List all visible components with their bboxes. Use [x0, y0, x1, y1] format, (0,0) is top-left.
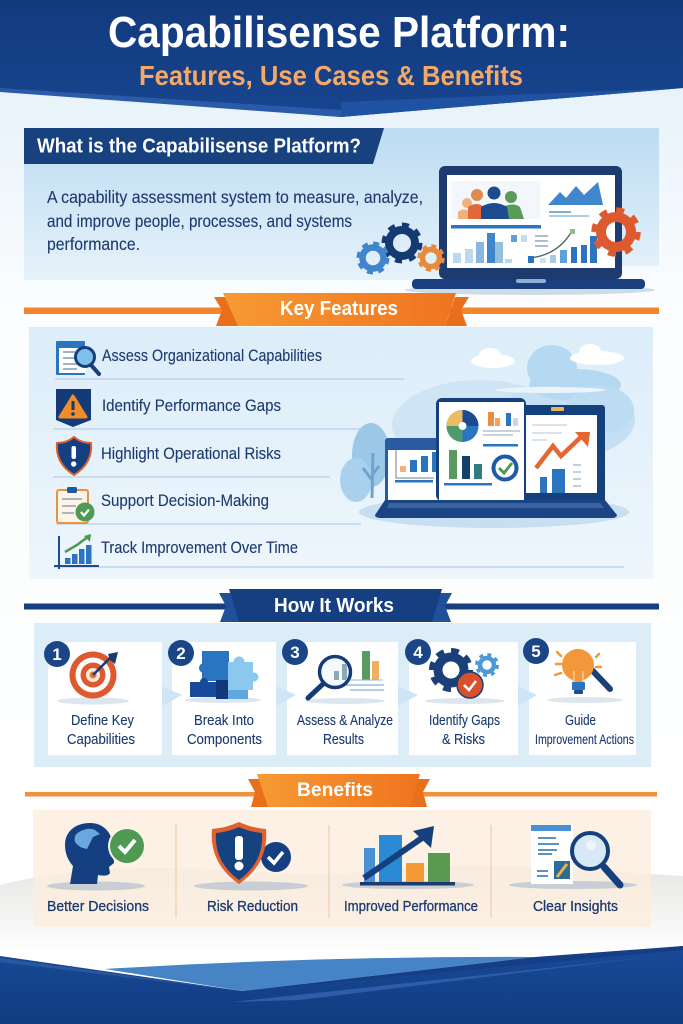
- icon: blue gear: [358, 244, 388, 272]
- icon: dark gear: [384, 225, 420, 261]
- feature 1 label: Assess Organizational Capabilities: [102, 346, 322, 365]
- icon: red gear: [594, 210, 638, 254]
- icon: light bulb and magnifier: [555, 649, 610, 694]
- step label: Break Into: [194, 713, 254, 729]
- step 1: [44, 641, 162, 755]
- step label: Results: [323, 732, 364, 748]
- feature 2 label: Identify Performance Gaps: [102, 396, 281, 415]
- feature 4 icon: clipboard with check: [57, 487, 94, 523]
- title: Capabilisense Platform:: [108, 8, 570, 57]
- benefit label: Better Decisions: [47, 898, 149, 915]
- step label: & Risks: [442, 732, 485, 748]
- step label: [67, 713, 135, 748]
- feature 1 icon: document with magnifier: [56, 341, 99, 375]
- icon: magnifier with bars: [308, 651, 384, 698]
- step 3: [282, 639, 398, 755]
- tree: [340, 423, 390, 502]
- icon: bar chart with arrow: [360, 826, 455, 886]
- description line 2: and improve people, processes, and systems: [47, 211, 352, 231]
- section divider: key features: [24, 293, 659, 326]
- feature 3 icon: risk shield: [57, 437, 91, 475]
- icon: report with magnifier: [531, 825, 620, 885]
- benefit: clear insights: [509, 825, 637, 915]
- step 5: [523, 638, 636, 755]
- right screen: [522, 405, 605, 503]
- illustration: clouds, tree and laptop: [340, 344, 635, 528]
- benefit label: Improved Performance: [344, 898, 478, 915]
- description line 3: performance.: [47, 234, 140, 254]
- heading: Benefits: [297, 780, 373, 801]
- step number: 4: [413, 643, 423, 662]
- section heading: What is the Capabilisense Platform?: [37, 136, 361, 158]
- step 2: [168, 640, 276, 755]
- step number: 2: [176, 644, 186, 663]
- description line 1: A capability assessment system to measure, analyze,: [47, 187, 423, 207]
- step label: Define Key: [71, 713, 135, 729]
- step number: 1: [52, 645, 62, 664]
- step label: Identify Gaps: [429, 713, 500, 729]
- step number: 3: [290, 643, 300, 662]
- icon: puzzle pieces: [190, 651, 258, 699]
- icon: target: [70, 652, 118, 698]
- step label: [187, 713, 262, 748]
- panel: benefits: [33, 810, 651, 927]
- feature 4 label: Support Decision-Making: [101, 491, 269, 510]
- panel: how it works: [34, 623, 651, 767]
- step label: Improvement Actions: [535, 731, 634, 747]
- heading: How It Works: [274, 595, 394, 617]
- panel: what is the platform: [24, 128, 659, 280]
- benefit label: Clear Insights: [533, 898, 618, 915]
- benefit: better decisions: [47, 823, 149, 915]
- benefit: risk reduction: [194, 822, 308, 915]
- step label: [429, 713, 500, 748]
- step 4: [405, 639, 518, 755]
- benefit label: Risk Reduction: [207, 898, 298, 915]
- footer band: [0, 946, 683, 1024]
- feature 5 icon: growth chart: [54, 534, 99, 569]
- step label: Components: [187, 732, 262, 748]
- section divider: benefits: [25, 774, 657, 807]
- left screen: [385, 438, 445, 504]
- step label: Guide: [565, 713, 596, 729]
- tablet dashboard: [436, 398, 526, 501]
- header banner: [0, 0, 683, 117]
- laptop base: [375, 500, 617, 518]
- section divider: how it works: [24, 589, 659, 622]
- panel: key features: [29, 327, 653, 579]
- step label: Assess & Analyze: [297, 713, 393, 729]
- section tab: [24, 128, 384, 164]
- step label: [297, 713, 393, 748]
- icon: shield with check: [212, 822, 291, 884]
- arrows between steps: [162, 686, 537, 706]
- subtitle: Features, Use Cases & Benefits: [139, 60, 523, 91]
- benefit: improved performance: [342, 826, 478, 915]
- heading: Key Features: [280, 298, 398, 320]
- icon: gears with check: [432, 650, 498, 698]
- icon: head with check: [65, 823, 146, 884]
- step number: 5: [531, 642, 541, 661]
- feature 3 label: Highlight Operational Risks: [101, 444, 281, 463]
- icon: small orange gear: [419, 246, 443, 270]
- step label: Capabilities: [67, 732, 135, 748]
- illustration: laptop with dashboard and gears: [358, 166, 655, 295]
- background hill: [0, 865, 683, 955]
- feature 5 label: Track Improvement Over Time: [101, 538, 298, 557]
- step label: [535, 713, 634, 747]
- feature 2 icon: warning badge: [56, 389, 91, 427]
